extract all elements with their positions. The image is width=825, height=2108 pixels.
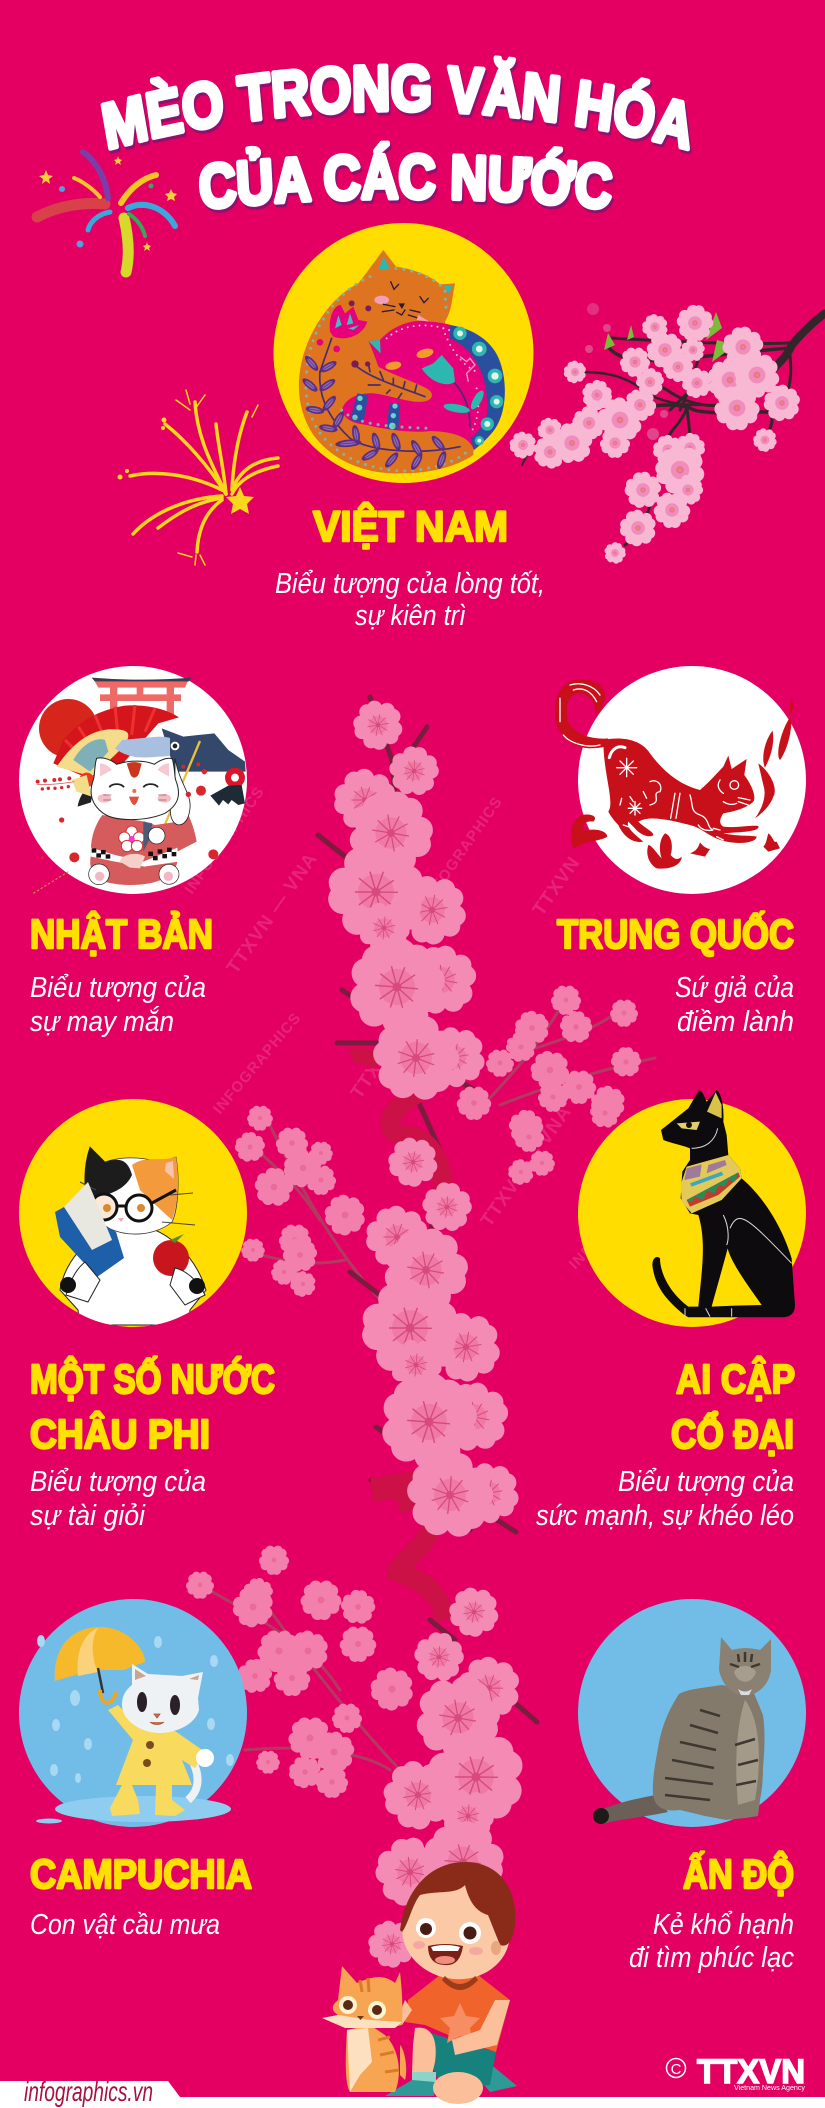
icon: yellow firework [118, 390, 278, 565]
Japan circle [19, 666, 247, 894]
watermarks: INFOGRAPHICS [181, 783, 268, 897]
large blossoms [308, 697, 541, 1974]
Vietnam circle [274, 223, 534, 483]
heading: Ấn Độ: ẤN ĐỘ [683, 1851, 794, 1897]
description: China: Sứ giả của [675, 972, 794, 1004]
watermarks: TTXVN — VNA [477, 1102, 576, 1231]
central blossom tree [185, 697, 655, 1974]
description: African countries [30, 1466, 206, 1532]
title line 1: MÈO TRONG VĂN HÓA [100, 55, 692, 154]
icon: red paper-cut cat [555, 679, 794, 869]
blossoms [505, 297, 807, 570]
icon: folk art cats [299, 250, 505, 473]
description: Cambodia: Con vật cầu mưa [30, 1909, 220, 1941]
watermarks: INFOGRAPHICS [419, 793, 506, 907]
India circle [578, 1599, 806, 1827]
top right blossom branch [505, 297, 825, 570]
heading: Ai Cập cổ đại: AI CẬP [676, 1356, 795, 1402]
side branch stems [200, 1000, 655, 1780]
description: Vietnam [275, 568, 545, 632]
child [385, 1862, 517, 2104]
ribbons [352, 1056, 445, 1620]
heading: Một số nước châu Phi [30, 1356, 275, 1457]
watermarks: INFOGRAPHICS [566, 1171, 668, 1273]
description: Egypt: Biểu tượng của [618, 1466, 794, 1498]
panel: Japan [19, 666, 247, 1038]
heading: Nhật Bản: NHẬT BẢN [30, 911, 213, 957]
Egypt circle [578, 1099, 806, 1327]
watermarks: TTXVN — VNA [223, 849, 322, 978]
watermarks: TTXVN [347, 1036, 403, 1103]
title line 2: CỦA CÁC NƯỚC [198, 140, 615, 214]
description: African countries: Biểu tượng của [30, 1466, 206, 1498]
panel: India [578, 1599, 806, 1974]
description: Egypt [536, 1466, 794, 1532]
description: Vietnam: sự kiên trì [355, 600, 466, 632]
description: Japan [30, 972, 206, 1038]
Cambodia circle [19, 1599, 247, 1827]
cat [322, 1966, 406, 2092]
panel: African countries [19, 1099, 275, 1532]
description: Vietnam: Biểu tượng của lòng tốt, [275, 568, 545, 600]
description: Japan: Biểu tượng của [30, 972, 206, 1004]
title [100, 55, 692, 214]
panel: China [555, 666, 806, 1038]
heading: Một số nước châu Phi: MỘT SỐ NƯỚC [30, 1356, 275, 1402]
icon: Bastet black cat [652, 1090, 795, 1317]
watermarks [181, 783, 668, 1273]
panel: Vietnam [274, 223, 545, 632]
description: Japan: sự may mắn [30, 1005, 174, 1038]
heading: Campuchia: CAMPUCHIA [30, 1851, 252, 1897]
description: African countries: sự tài giỏi [30, 1500, 146, 1532]
description: China: điềm lành [677, 1006, 794, 1038]
China circle [578, 666, 806, 894]
logo: TTXVN: C [671, 2061, 682, 2078]
description: India: Kẻ khổ hạnh [653, 1909, 794, 1941]
description: China [675, 972, 794, 1038]
logo: infographics.vn: infographics.vn [24, 2076, 153, 2107]
heading: Ai Cập cổ đại: CỔ ĐẠI [671, 1410, 794, 1457]
heading: Ai Cập cổ đại [671, 1356, 795, 1457]
description: Egypt: sức mạnh, sự khéo léo [536, 1500, 794, 1532]
icon: child with cat [322, 1862, 517, 2104]
icon: cat with glasses [55, 1147, 206, 1325]
icon: colourful firework [37, 152, 177, 272]
icon: tabby cat [593, 1637, 771, 1824]
logo: TTXVN: TTXVN [697, 2053, 805, 2091]
icon: cat in raincoat [36, 1627, 234, 1824]
icon: maneki neko [33, 678, 246, 893]
description: India: đi tìm phúc lạc [629, 1942, 794, 1974]
description: India [629, 1909, 794, 1974]
watermarks: INFOGRAPHICS [210, 1009, 305, 1118]
watermarks: TTXVN [529, 853, 585, 920]
logo: TTXVN: Vietnam News Agency [734, 2085, 805, 2092]
heading: Việt Nam: VIỆT NAM [313, 502, 508, 551]
footer strip [0, 2081, 825, 2108]
branch wood [522, 313, 825, 545]
heading: Một số nước châu Phi: CHÂU PHI [30, 1411, 210, 1457]
Africa circle [19, 1099, 247, 1327]
leaves and buds [604, 312, 735, 362]
main stem [318, 697, 537, 1945]
panel: Cambodia [19, 1599, 252, 1941]
panel: Ancient Egypt [536, 1090, 806, 1532]
side small blossoms [185, 986, 648, 1800]
